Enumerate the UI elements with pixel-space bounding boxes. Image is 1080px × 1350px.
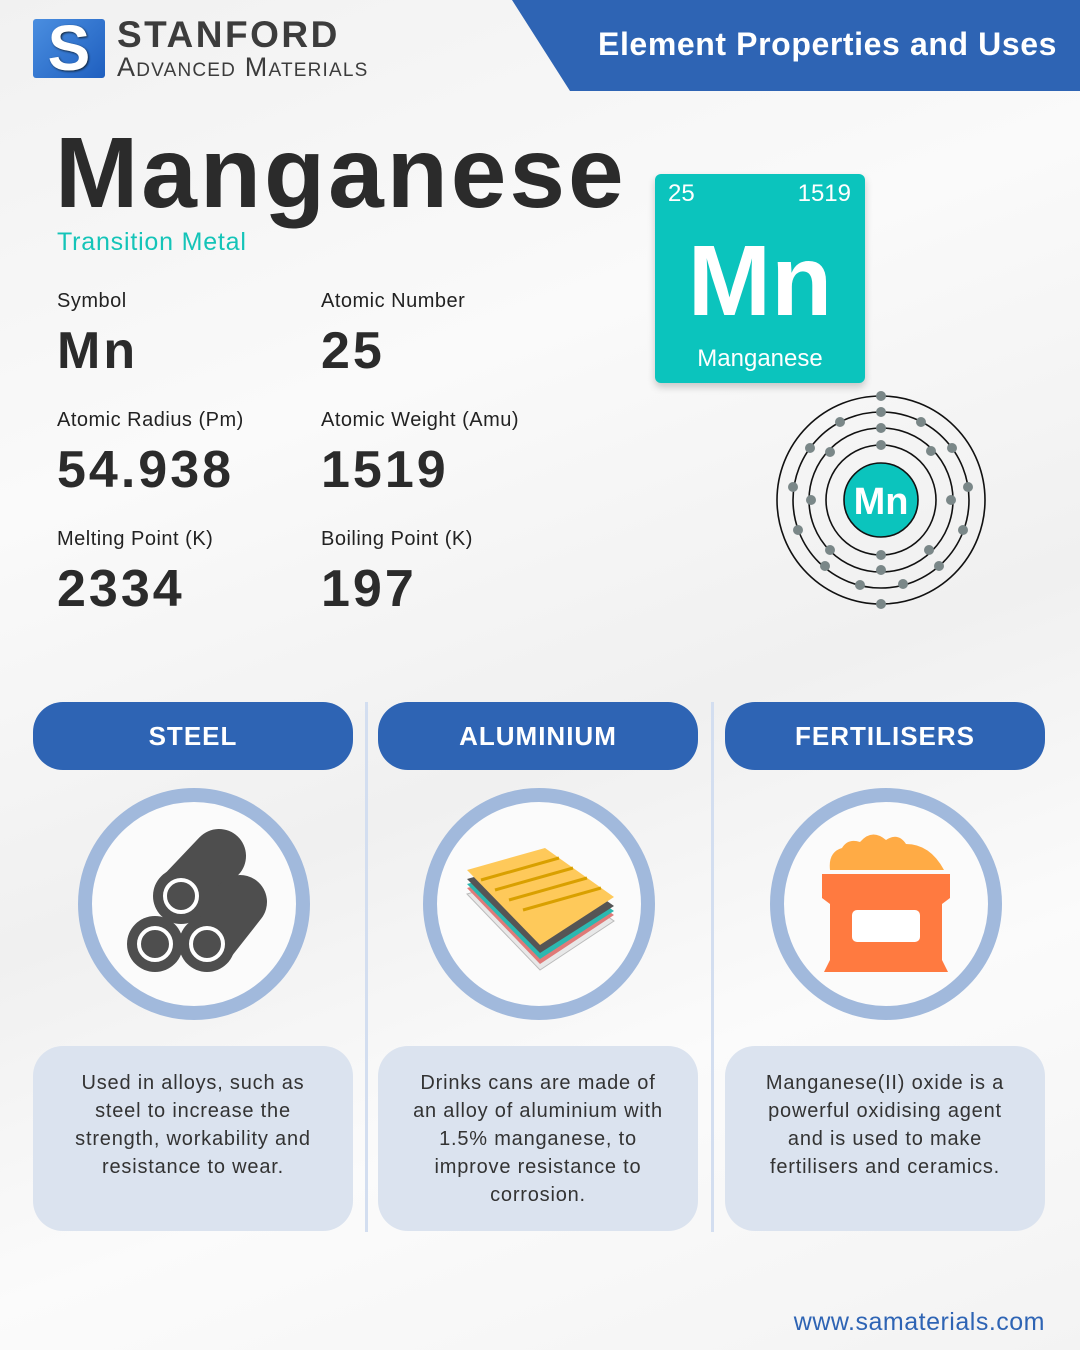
footer url: www.samaterials.com [794,1308,1045,1336]
element tile: 1519 [798,180,851,207]
heading: aluminium: ALUMINIUM [459,721,617,751]
text: fertilisers: fertilisers and ceramics. [770,1156,1000,1178]
text: steel: resistance to wear. [102,1156,284,1178]
text: fertilisers: and is used to make [788,1128,982,1150]
text: aluminium: improve resistance to [435,1156,641,1178]
logo subtitle: Advanced Materials [117,52,369,82]
boiling point: Boiling Point (K) [321,528,473,550]
icon: fertiliser bag [770,788,1002,1020]
properties: 2334 [57,560,185,618]
text: aluminium: Drinks cans are made of [420,1072,656,1094]
header title: Element Properties and Uses [598,26,1057,62]
text: fertilisers [725,1046,1045,1231]
heading: fertilisers: FERTILISERS [795,721,975,751]
properties: 1519 [321,441,449,499]
text: steel [33,1046,353,1231]
element tile: 25 [668,180,695,207]
element tile: Manganese [697,345,823,372]
text: fertilisers: Manganese(II) oxide is a [766,1072,1004,1094]
symbol: Symbol [57,290,127,312]
heading: steel: STEEL [149,721,237,751]
logo icon [33,19,105,78]
atomic number: Atomic Number [321,290,465,312]
text: aluminium: corrosion. [490,1184,586,1206]
properties: 197 [321,560,417,618]
properties: 25 [321,322,385,380]
text: steel: steel to increase the [95,1100,291,1122]
panel: aluminium [378,702,698,1231]
properties: 54.938 [57,441,234,499]
heading: steel [33,702,353,770]
atom diagram: Mn [854,481,908,523]
properties [57,290,519,618]
text: aluminium: 1.5% manganese, to [439,1128,637,1150]
atomic weight: Atomic Weight (Amu) [321,409,519,431]
text: aluminium: an alloy of aluminium with [413,1100,663,1122]
heading: aluminium [378,702,698,770]
icon: pipes [78,788,310,1020]
title: Manganese [55,117,627,229]
element tile [655,174,865,383]
panel: steel [33,702,353,1231]
atom diagram [776,391,986,609]
icon: sheets [423,788,655,1020]
melting point: Melting Point (K) [57,528,213,550]
element tile: Mn [688,225,832,337]
logo icon: S [48,12,90,84]
logo text: STANFORD [117,14,340,55]
text: steel: strength, workability and [75,1128,311,1150]
text: steel: Used in alloys, such as [82,1072,304,1094]
text: aluminium [378,1046,698,1231]
text: fertilisers: powerful oxidising agent [768,1100,1002,1122]
header banner [512,0,1080,91]
logo [33,12,340,84]
atomic radius: Atomic Radius (Pm) [57,409,244,431]
properties: Mn [57,322,138,380]
subtitle: Transition Metal [57,228,247,256]
heading: fertilisers [725,702,1045,770]
panel: fertilisers [725,702,1045,1231]
